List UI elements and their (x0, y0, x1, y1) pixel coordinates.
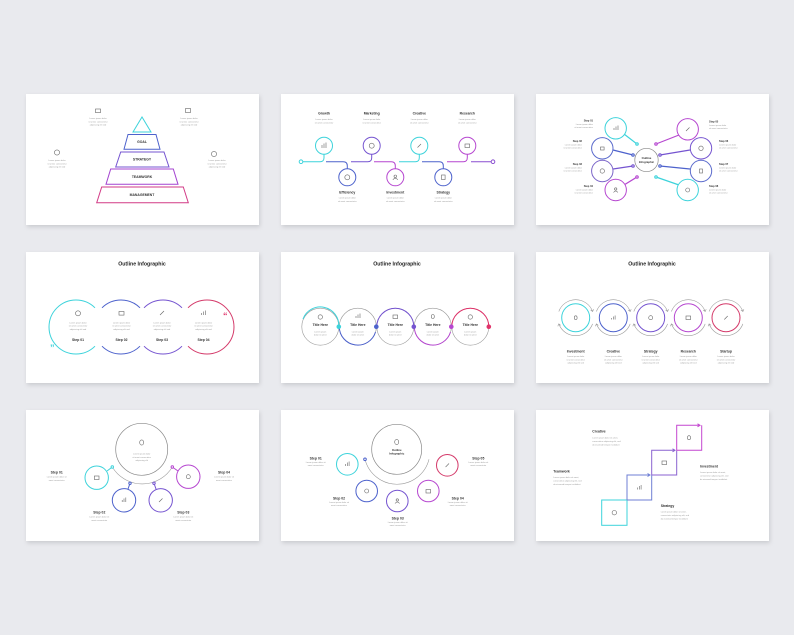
center circle (635, 148, 658, 172)
steps: sit amet consectetur (194, 325, 213, 328)
top circles (316, 137, 476, 186)
labels bottom: Efficiency (339, 190, 355, 194)
panel: quote rings slide: “ (223, 311, 228, 321)
panel: hub slide: Lorem ipsum dolor (709, 124, 727, 127)
labels (47, 470, 234, 522)
labels: sit amet consectetur (604, 358, 623, 361)
labels: sit amet consectetur (717, 358, 736, 361)
labels: Step 01 (51, 470, 63, 474)
labels top: Research (460, 111, 475, 115)
labels: consectetur adipiscing elit, sed (661, 514, 690, 517)
panel: hub slide: Lorem ipsum dolor (719, 143, 737, 146)
pyramid (97, 117, 188, 203)
step labels: Step 01 (584, 119, 594, 123)
items: Lorem ipsum (314, 330, 327, 333)
labels bottom: Lorem ipsum dolor (339, 196, 356, 200)
step labels: Lorem ipsum dolor (576, 188, 593, 191)
labels: Lorem ipsum dolor (642, 355, 660, 358)
pyramid: MANAGEMENT (130, 193, 155, 197)
labels (566, 350, 736, 365)
steps: sit amet consectetur (112, 325, 131, 328)
labels: Strategy (644, 350, 658, 354)
panel: cycle circles slide (536, 252, 770, 385)
labels: sit amet consectetur (641, 358, 660, 361)
labels top: Marketing (364, 111, 380, 115)
text block: top-right: adipiscing elit sed (181, 124, 198, 127)
labels: adipiscing elit sed (718, 362, 735, 365)
steps: adipiscing elit sed (154, 328, 171, 331)
labels bottom: Strategy (437, 190, 450, 194)
labels: adipiscing elit sed (680, 362, 697, 365)
steps: Step 01 (72, 338, 84, 342)
text block: bottom-left (47, 150, 67, 169)
labels top: sit amet consectetur (458, 122, 477, 125)
big circle: adipiscing elit (135, 459, 148, 462)
labels: sit amet consectetur (566, 358, 585, 361)
labels: Research (681, 350, 696, 354)
items: dolor sit amet (464, 333, 477, 336)
panel: hub slide: sit amet consectetur (709, 191, 728, 194)
panel: hub slide (536, 94, 770, 227)
step labels: sit amet consectetur (574, 126, 593, 129)
steps (69, 310, 213, 342)
steps: sit amet consectetur (69, 325, 88, 328)
inner colored circles (562, 304, 740, 332)
labels: consectetur adipiscing elit, sed (700, 474, 729, 478)
labels bottom: Lorem ipsum dolor (387, 196, 404, 200)
text block: top-right: Lorem ipsum dolor (180, 117, 198, 120)
labels: amet consectetur (470, 464, 487, 467)
step labels: Lorem ipsum dolor (565, 143, 582, 146)
labels bottom: Lorem ipsum dolor (435, 196, 452, 200)
labels (553, 430, 729, 520)
steps: Lorem ipsum dolor (113, 321, 130, 324)
labels: Lorem ipsum dolor sit (214, 476, 234, 478)
staircase (602, 424, 702, 525)
labels: Creative (607, 350, 620, 354)
text block: bottom-right: sit amet, consectetur (207, 162, 227, 165)
items: Title Here (313, 323, 328, 327)
labels: do eiusmod tempor incididunt (553, 483, 581, 486)
labels: Lorem ipsum dolor sit (306, 461, 326, 464)
icons (322, 142, 470, 180)
text block: top-left: sit amet, consectetur (88, 120, 108, 123)
center circle: Outline (642, 156, 652, 160)
gray circles (302, 308, 489, 345)
labels: Step 04 (452, 496, 464, 500)
panel: staircase slide (536, 410, 770, 543)
text block: top-right: sit amet, consectetur (179, 120, 199, 123)
timeline line (299, 154, 495, 169)
step labels: Step 02 (573, 139, 583, 143)
labels: do eiusmod tempor incididunt (661, 517, 688, 520)
pyramid: STRATEGY (133, 158, 152, 162)
labels: Step 05 (472, 456, 484, 460)
big circle: Infographic (389, 452, 405, 456)
labels bottom (338, 190, 453, 203)
labels: Lorem ipsum dolor sit (388, 521, 408, 524)
labels: adipiscing elit sed (642, 362, 660, 365)
big circle: Outline (392, 448, 402, 452)
steps: adipiscing elit sed (195, 328, 213, 331)
panel: hub slide: Step 07 (719, 162, 729, 166)
labels top: Creative (413, 111, 426, 115)
quote marks: ” (50, 343, 54, 353)
steps: Lorem ipsum dolor (153, 321, 171, 324)
steps: sit amet consectetur (153, 325, 172, 328)
labels: Lorem ipsum dolor sit amet, (661, 510, 687, 513)
text block: bottom-left: adipiscing elit sed (49, 166, 66, 169)
step labels (563, 119, 594, 194)
step circles (592, 118, 712, 201)
labels: Investment (700, 465, 719, 469)
panel: hub slide: Lorem ipsum dolor (709, 188, 727, 191)
items: dolor sit amet (389, 333, 402, 336)
labels: Lorem ipsum dolor sit (448, 501, 468, 504)
labels: amet consectetur (175, 519, 192, 522)
labels: Step 03 (177, 510, 189, 514)
step labels: sit amet consectetur (563, 169, 582, 172)
labels: amet consectetur (450, 504, 466, 507)
step labels: Lorem ipsum dolor (565, 166, 582, 169)
text block: top-right (179, 108, 199, 127)
panel: quote rings slide (26, 252, 260, 385)
items: dolor sit amet (427, 333, 439, 336)
labels: do eiusmod tempor incididunt (700, 478, 728, 481)
labels top: Lorem ipsum dolor (315, 118, 333, 121)
labels: adipiscing elit sed (567, 362, 585, 365)
labels bottom: sit amet consectetur (338, 200, 357, 203)
labels: Lorem ipsum dolor sit amet, (700, 471, 726, 474)
items: Title Here (425, 323, 441, 327)
rings (49, 300, 234, 354)
text block: bottom-left: Lorem ipsum dolor (48, 159, 66, 162)
text block: bottom-right: Lorem ipsum dolor (208, 159, 226, 162)
text block: top-left: adipiscing elit sed (90, 124, 107, 127)
labels top: Growth (318, 111, 330, 115)
step labels: sit amet consectetur (574, 191, 593, 194)
arc (365, 459, 429, 484)
step labels: Lorem ipsum dolor (576, 123, 593, 126)
step circles (85, 465, 200, 512)
labels: Step 02 (93, 510, 105, 514)
labels: Step 02 (333, 496, 345, 500)
labels: consectetur adipiscing elit, sed (553, 480, 582, 482)
labels: Lorem ipsum dolor sit (47, 476, 67, 478)
big circle (372, 424, 422, 474)
labels top (315, 111, 477, 125)
labels top: Lorem ipsum dolor (411, 118, 428, 121)
labels top: Lorem ipsum dolor (459, 118, 476, 121)
center circle: Infographic (639, 160, 655, 164)
labels: Teamwork (553, 470, 570, 474)
labels top: sit amet consectetur (362, 122, 381, 125)
labels: amet consectetur (216, 479, 232, 482)
labels: consectetur adipiscing elit, sed (592, 440, 621, 443)
step labels: sit amet consectetur (563, 146, 582, 149)
step circles (336, 454, 458, 512)
step labels: Step 04 (584, 184, 594, 188)
panel: hub slide: sit amet consectetur (709, 127, 728, 130)
labels: Step 01 (310, 456, 322, 460)
items: Title Here (350, 323, 366, 327)
steps: Step 04 (197, 338, 210, 342)
labels: adipiscing elit sed (605, 362, 622, 365)
labels bottom: Investment (386, 190, 405, 194)
connectors (613, 134, 690, 185)
labels: amet consectetur (308, 464, 324, 467)
text block: bottom-left: sit amet, consectetur (47, 162, 67, 165)
big circle: sit amet consectetur (132, 456, 151, 459)
labels top: sit amet consectetur (410, 122, 429, 125)
items: dolor sit amet (314, 333, 327, 336)
labels: do eiusmod tempor incididunt (592, 443, 620, 446)
heading: Outline Infographic (373, 262, 421, 268)
big circle (116, 423, 168, 475)
labels: Lorem ipsum dolor (680, 355, 697, 358)
labels: Investment (567, 350, 586, 354)
pyramid: GOAL (137, 140, 147, 144)
steps: Lorem ipsum dolor (195, 321, 212, 324)
panel: hub slide: Step 05 (709, 120, 719, 124)
panel: hub slide: sit amet consectetur (719, 146, 738, 149)
labels: Lorem ipsum dolor sit amet, (592, 436, 618, 439)
labels: Lorem ipsum dolor sit (468, 461, 489, 464)
heading: Outline Infographic (118, 262, 166, 268)
text block: top-left (88, 109, 108, 127)
items (313, 314, 478, 336)
panel: hub slide: Lorem ipsum dolor (719, 166, 737, 169)
heading: Outline Infographic (628, 262, 676, 268)
labels: Step 03 (392, 516, 404, 520)
panel: hub slide: Step 08 (709, 184, 719, 188)
labels: Lorem ipsum dolor sit (329, 501, 349, 504)
labels: Creative (592, 430, 606, 434)
text block: top-left: Lorem ipsum dolor (89, 117, 107, 120)
items: Title Here (388, 323, 403, 327)
panel: hub slide: sit amet consectetur (719, 169, 738, 172)
labels (306, 456, 489, 527)
items: Lorem ipsum (352, 330, 364, 333)
pyramid: TEAMWORK (132, 175, 153, 179)
labels: Lorem ipsum dolor (605, 355, 622, 358)
labels: amet consectetur (331, 504, 347, 507)
labels: Lorem ipsum dolor (567, 355, 585, 358)
labels: amet consectetur (390, 524, 406, 527)
labels: Startup (720, 350, 732, 354)
steps: Step 03 (156, 338, 168, 342)
panel: pyramid slide (26, 94, 260, 227)
labels top: Lorem ipsum dolor (363, 118, 381, 121)
items: Lorem ipsum (389, 330, 402, 333)
labels: Lorem ipsum dolor sit amet, (553, 476, 579, 479)
labels: Lorem ipsum dolor sit (89, 516, 110, 518)
items: Lorem ipsum (427, 330, 439, 333)
labels: Strategy (661, 504, 674, 508)
panel: bulb five steps slide (281, 410, 515, 543)
labels: amet consectetur (49, 479, 65, 482)
labels bottom: sit amet consectetur (434, 200, 453, 203)
items: Lorem ipsum (464, 330, 477, 333)
steps: Step 02 (115, 338, 128, 342)
outer gray arcs (558, 300, 744, 336)
arc (112, 467, 172, 484)
items: dolor sit amet (352, 333, 364, 336)
labels: Lorem ipsum dolor (717, 355, 735, 358)
labels: Step 04 (218, 470, 230, 474)
labels: Lorem ipsum dolor sit (173, 516, 194, 518)
big circle: Lorem ipsum dolor (133, 452, 151, 456)
panel: timeline slide (281, 94, 515, 227)
steps: Lorem ipsum dolor (69, 321, 87, 324)
step labels: Step 03 (573, 162, 583, 166)
labels: sit amet consectetur (679, 358, 698, 361)
panel: hub slide: Step 06 (719, 139, 729, 143)
connector dots (336, 324, 491, 329)
panel: chained circles slide (281, 252, 515, 385)
panel: bulb four steps slide (26, 410, 260, 543)
text block: bottom-right: adipiscing elit sed (209, 166, 226, 169)
colored arcs (303, 307, 489, 345)
labels top: sit amet consectetur (315, 122, 334, 125)
steps: adipiscing elit sed (70, 328, 87, 331)
text block: bottom-right (207, 151, 227, 169)
labels: amet consectetur (91, 519, 108, 522)
steps: adipiscing elit sed (113, 328, 131, 331)
items: Title Here (463, 323, 478, 327)
labels bottom: sit amet consectetur (386, 200, 405, 203)
